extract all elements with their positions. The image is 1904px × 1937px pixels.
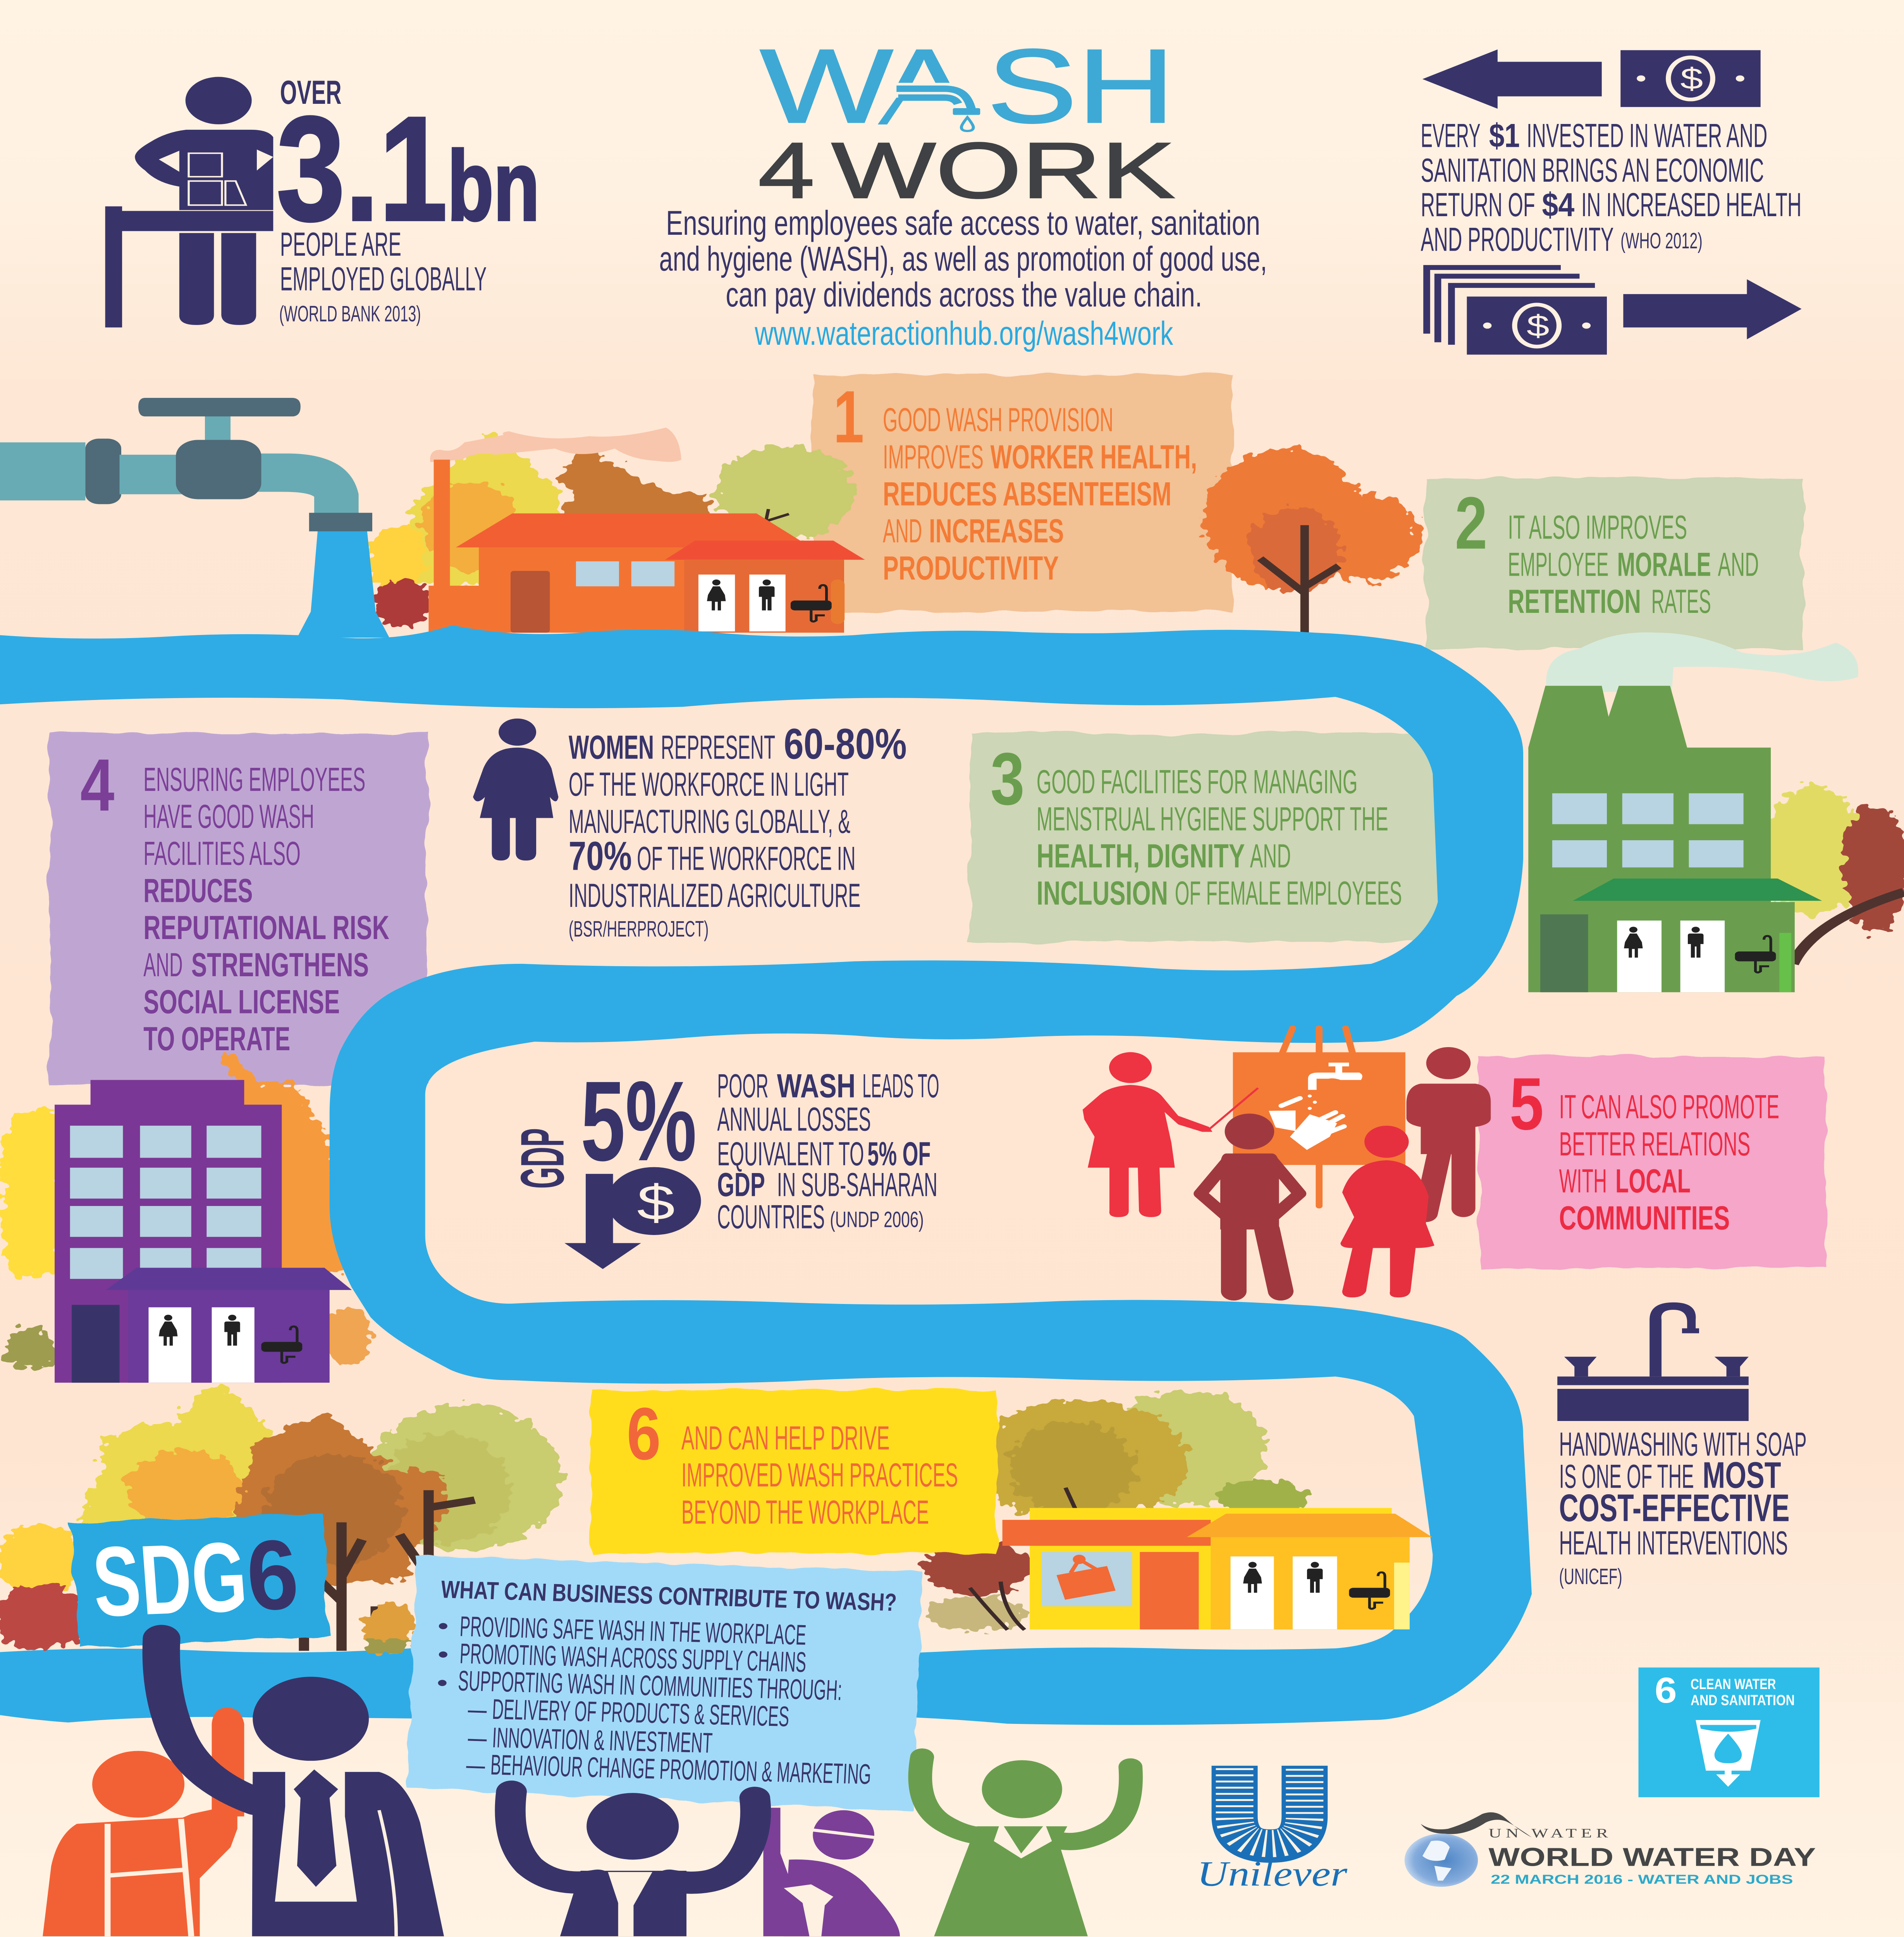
trees right of green factory: [1769, 788, 1904, 964]
number: 3.1: 3.1: [277, 86, 447, 251]
panel 1 text: REDUCES ABSENTEEISM: [883, 475, 1171, 513]
women text: WOMEN: [569, 729, 654, 766]
panel 3 text: HEALTH, DIGNITY: [1037, 838, 1245, 875]
number 5: 5: [1510, 1062, 1544, 1145]
GDP text: EQUIVALENT TO: [717, 1135, 864, 1173]
green factory: [1528, 686, 1822, 992]
GDP text: COUNTRIES: [717, 1198, 825, 1236]
title: 4: [758, 126, 815, 215]
caption: [279, 226, 487, 326]
panel 2 text: MORALE: [1617, 546, 1711, 583]
factory smoke 1: [430, 428, 681, 462]
front woman: [1340, 1126, 1434, 1297]
GDP text: POOR: [717, 1067, 769, 1104]
date: 22 MARCH 2016 - WATER AND JOBS: [1491, 1872, 1793, 1887]
GDP text: (UNDP 2006): [830, 1207, 924, 1232]
icon: stack of bills: [1427, 268, 1607, 354]
front man: [1201, 1113, 1300, 1291]
icon: dollar with down arrow: $: [637, 1175, 675, 1230]
panel 3: menstrual hygiene: OF FEMALE EMPLOYEES: [1175, 875, 1402, 912]
panel 1 text: [883, 401, 1197, 587]
trees around purple building: [3, 1060, 367, 1367]
text: MANUFACTURING GLOBALLY, &: [569, 803, 850, 840]
icon: dollar bill: $: [1680, 62, 1703, 95]
number 1: 1: [833, 375, 864, 458]
title: A: [878, 28, 971, 145]
panel 2 text: RETENTION: [1508, 583, 1641, 620]
green person with raised arms: [920, 1757, 1131, 1936]
panel 6: beyond the workplace: BEYOND THE WORKPLACE: [681, 1494, 929, 1531]
number 3: 3: [991, 737, 1025, 820]
contribution list: INNOVATION & INVESTMENT: [492, 1722, 713, 1759]
women text: (BSR/HERPROJECT): [569, 916, 709, 941]
SDG6 sign: [70, 1512, 330, 1647]
badge label: [1691, 1676, 1795, 1708]
handwashing text: [1559, 1426, 1807, 1589]
panel 2: morale: [1426, 478, 1803, 649]
panel 3 text: INCLUSION: [1037, 875, 1168, 912]
contribution list: DELIVERY OF PRODUCTS & SERVICES: [492, 1693, 790, 1732]
man in suit with raised arm: [161, 1638, 444, 1936]
panel 3: menstrual hygiene: MENSTRUAL HYGIENE SUPPORT THE: [1037, 800, 1388, 838]
title: WORK: [832, 126, 1175, 215]
title: SH: [987, 28, 1175, 145]
panel 3: menstrual hygiene: [970, 731, 1469, 943]
panel 1: worker health: [813, 374, 1233, 612]
orange worker: [43, 1708, 244, 1936]
UN Water: UN WATER: [1489, 1826, 1608, 1840]
panel 2 text: [1508, 509, 1759, 620]
number: 5%: 5%: [581, 1058, 697, 1185]
intro paragraph: Ensuring employees safe access to water, sanitation: [666, 203, 1260, 242]
GDP text: ANNUAL LOSSES: [717, 1101, 871, 1138]
panel 1 text: PRODUCTIVITY: [883, 550, 1059, 587]
tree right of panel 1: [1209, 452, 1414, 634]
caption: PEOPLE ARE: [280, 226, 401, 263]
handwashing text: (UNICEF): [1559, 1564, 1622, 1589]
panel 4: reputational risk: ENSURING EMPLOYEES: [143, 761, 365, 798]
text: BEHAVIOUR CHANGE PROMOTION & MARKETING: [490, 1749, 872, 1790]
number 4: 4: [80, 743, 114, 826]
handwashing text: MOST: [1703, 1455, 1781, 1496]
purple worker with hard hat: [763, 1808, 900, 1936]
panel 1 text: GOOD WASH PROVISION: [883, 401, 1113, 439]
panel 6: beyond the workplace: [591, 1390, 997, 1553]
text: every $1 invested: AND PRODUCTIVITY: [1421, 221, 1614, 258]
caption: (WORLD BANK 2013): [279, 301, 421, 326]
number 2: 2: [1455, 482, 1487, 564]
number 6: 6: [627, 1392, 661, 1475]
Unilever U mark: [1235, 1766, 1305, 1846]
panel 1 text: INCREASES: [929, 513, 1064, 550]
economic return block: [1421, 50, 1802, 354]
icon: dollar with down arrow: [564, 1167, 701, 1269]
women text: REPRESENT: [661, 729, 775, 766]
GDP text: [717, 1067, 939, 1236]
panel 6 text: AND CAN HELP DRIVE: [681, 1419, 890, 1457]
badge number: 6: [1655, 1670, 1677, 1710]
text: every $1 invested: [1421, 117, 1802, 258]
title: W: [760, 28, 894, 145]
text: IMPROVED WASH PRACTICES: [681, 1457, 958, 1494]
left tree cluster: [0, 1389, 557, 1651]
badge label: AND SANITATION: [1691, 1692, 1795, 1708]
swoosh: [1421, 1812, 1532, 1837]
panel 5 text: WITH: [1559, 1163, 1607, 1200]
women text: 60-80%: [784, 719, 907, 768]
back man: [1406, 1047, 1491, 1213]
panel 5 text: LOCAL: [1615, 1163, 1691, 1200]
intro paragraph: and hygiene (WASH), as well as promotion of good use,: [659, 239, 1267, 278]
women text: 70%: [569, 833, 632, 879]
6 numeral: 6: [243, 1519, 302, 1631]
contribution list: [438, 1610, 872, 1790]
text: every $1 invested: (WHO 2012): [1620, 228, 1703, 253]
trees behind factory 1: [372, 435, 850, 623]
link: www.wateractionhub.org/wash4work: [755, 315, 1173, 352]
GDP text: GDP: [717, 1166, 765, 1204]
text: 5% OF: [867, 1135, 931, 1173]
women text: [569, 719, 907, 941]
business contribution panel: PROMOTING WASH ACROSS SUPPLY CHAINS: [459, 1638, 807, 1678]
river: [0, 625, 1532, 1725]
panel 3: menstrual hygiene: GOOD FACILITIES FOR MANAGING: [1037, 764, 1357, 801]
text: SUPPORTING WASH IN COMMUNITIES THROUGH:: [458, 1665, 843, 1706]
icon: arrow left: [1422, 50, 1602, 109]
panel 1: worker health: WORKER HEALTH,: [991, 439, 1197, 476]
panel 3 text: [1037, 764, 1402, 912]
Unilever wordmark: Unilever: [1197, 1854, 1348, 1894]
teacher: [1083, 1052, 1258, 1217]
panel 5 text: [1559, 1088, 1779, 1237]
panel 4 text: TO OPERATE: [143, 1020, 290, 1058]
shop: [1003, 1508, 1432, 1629]
panel 1 text: IMPROVES: [883, 439, 984, 476]
text: every $1 invested: RETURN OF: [1421, 186, 1535, 224]
Unilever logo: [1197, 1766, 1348, 1894]
panel 4 text: FACILITIES ALSO: [143, 835, 301, 872]
panel 4 text: AND: [143, 946, 183, 984]
text: every $1 invested: EVERY: [1421, 117, 1481, 155]
GDP statistic: [509, 1058, 939, 1269]
easel and people group: [1083, 1028, 1491, 1297]
text: OF THE WORKFORCE IN LIGHT: [569, 766, 849, 803]
panel 4 text: HAVE GOOD WASH: [143, 798, 314, 835]
easel board with handwashing icon: [1233, 1028, 1405, 1206]
shop sign: [1059, 1556, 1113, 1598]
navy person holding panel: [510, 1792, 756, 1936]
globe: [1405, 1834, 1478, 1887]
text: IN SUB-SAHARAN: [777, 1166, 937, 1204]
panel 4 text: REPUTATIONAL RISK: [143, 909, 389, 946]
intro paragraph: [659, 203, 1267, 314]
trees behind shop: [929, 1394, 1305, 1630]
header stat: 3.1bn people employed: OVER: [280, 74, 342, 111]
icon: dollar bill: [1620, 50, 1761, 107]
text: OF THE WORKFORCE IN: [637, 840, 855, 877]
factory smoke 2: [1546, 632, 1858, 692]
icon: arrow right: [1623, 279, 1802, 339]
factory 1 with toilets: [428, 460, 865, 633]
panel 3 text: AND: [1250, 838, 1291, 875]
icon: person at desk: [105, 77, 273, 327]
World Water Day logo: [1405, 1812, 1816, 1887]
SDG text: SDG: [89, 1521, 251, 1638]
icon: sink: [1557, 1302, 1749, 1421]
panel 5: community relations: [1479, 1056, 1825, 1268]
panel 4 text: STRENGTHENS: [191, 946, 369, 984]
business contribution panel: PROVIDING SAFE WASH IN THE WORKPLACE: [459, 1610, 807, 1651]
panel 4 text: SOCIAL LICENSE: [143, 983, 340, 1021]
handwashing text: IS ONE OF THE: [1559, 1458, 1694, 1495]
purple building: [55, 1080, 352, 1383]
business contribution panel: [406, 1556, 922, 1811]
text: INDUSTRIALIZED AGRICULTURE: [569, 877, 861, 914]
header stat: 3.1bn people employed: EMPLOYED GLOBALLY: [280, 260, 487, 298]
icon: glass with drop and arrow: [1696, 1720, 1761, 1787]
text: every $1 invested: $4: [1542, 186, 1574, 224]
GDP rotated label: GDP: [509, 1128, 577, 1189]
panel 2 text: EMPLOYEE: [1508, 546, 1608, 583]
panel heading: WHAT CAN BUSINESS CONTRIBUTE TO WASH?: [440, 1576, 897, 1616]
panel 4 text: [143, 761, 389, 1058]
number unit: bn: bn: [447, 131, 540, 241]
panel 6 text: [681, 1419, 958, 1531]
women statistic: [473, 719, 907, 941]
World Water Day: WORLD WATER DAY: [1489, 1843, 1816, 1872]
icon: stack of bills: $: [1527, 309, 1550, 342]
panel 4: reputational risk: [50, 733, 427, 1085]
panel 2: morale: AND: [1718, 546, 1759, 583]
SDG 6 badge: [1639, 1667, 1820, 1797]
GDP text: WASH: [777, 1067, 855, 1104]
text: every $1 invested: $1: [1489, 117, 1520, 155]
panel 5 text: COMMUNITIES: [1559, 1200, 1730, 1237]
intro paragraph: can pay dividends across the value chain.: [726, 275, 1202, 314]
panel 4 text: REDUCES: [143, 872, 253, 909]
panel 2 text: RATES: [1651, 583, 1711, 620]
title: [759, 48, 1175, 199]
icon: woman: [473, 719, 558, 860]
badge label: CLEAN WATER: [1691, 1676, 1776, 1692]
faucet with water stream: [0, 398, 389, 638]
panel 1 text: AND: [883, 513, 922, 550]
text: LEADS TO: [862, 1067, 939, 1104]
handwashing statistic: [1557, 1302, 1807, 1589]
header stat: 3.1bn people employed: [105, 74, 540, 327]
